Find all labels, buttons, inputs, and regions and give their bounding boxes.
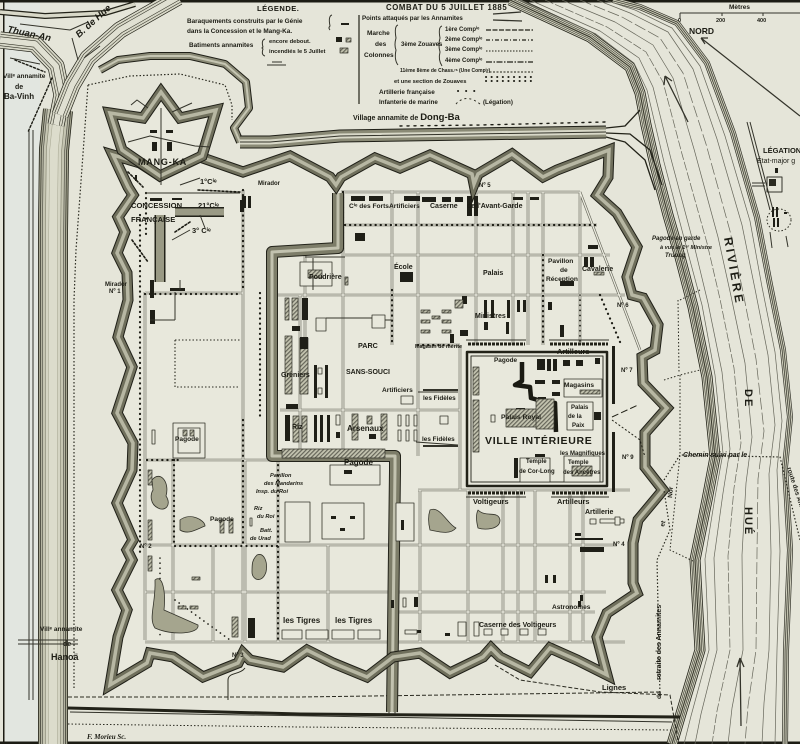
citadel labels: de la	[568, 414, 582, 420]
north arrow	[689, 26, 800, 116]
label: village de Hanoï: Hanoä	[51, 652, 80, 662]
dashed outer enceinte of Mang-Ka	[74, 74, 232, 690]
citadel labels: 21°Cⁱᵉ	[198, 200, 219, 210]
citadel labels: Nº 6	[617, 303, 629, 309]
citadel labels: PARC	[358, 341, 378, 350]
Mang-Ka star fort	[110, 92, 216, 185]
citadel labels: Nº 5	[479, 183, 491, 189]
legend: columns: Points attaqués par les Annamites	[362, 15, 463, 22]
legend: columns: et une section de Zouaves	[394, 79, 466, 85]
scale bar: 400	[757, 18, 766, 24]
citadel ramparts	[110, 150, 667, 685]
heading: Combat: COMBAT DU 5 JUILLET 1885	[386, 3, 507, 12]
river name	[721, 236, 755, 536]
scale bar: Mètres	[729, 4, 750, 11]
citadel labels	[105, 176, 634, 659]
scale bar: 0	[678, 18, 681, 24]
legend: buildings text: Baraquements construits par le Génie	[187, 18, 303, 25]
river: Rivière de Hué	[510, 0, 790, 744]
legend: buildings text	[187, 18, 325, 55]
scale bar: 200	[716, 18, 725, 24]
citadel labels: des Ancêtres	[563, 470, 601, 476]
small buildings in concession	[128, 172, 244, 387]
legend: buildings text: Batiments annamites	[189, 42, 254, 49]
citadel labels: Palais	[571, 405, 589, 411]
legend: columns: Marche	[367, 30, 390, 37]
label: retraite des Annamites: et	[659, 519, 668, 528]
citadel labels: Cavalerie	[582, 266, 613, 273]
label: chemin suivi	[683, 452, 800, 530]
river name: DE	[742, 389, 754, 408]
label: pagode gardée: Pagode en garde	[652, 236, 701, 242]
tree-lined avenues	[140, 190, 620, 642]
citadel labels: Pagode	[494, 357, 518, 364]
legend: columns: Colonnes	[364, 52, 394, 59]
citadel labels: Voltigeurs	[473, 497, 509, 506]
citadel labels: Poudrière	[309, 274, 342, 281]
village houses along canal	[400, 122, 605, 126]
citadel labels: 3° Cⁱᵉ	[192, 225, 211, 235]
palace buildings	[515, 362, 556, 432]
citadel labels: Mirador	[258, 181, 281, 187]
label: village de Hanoï	[40, 626, 83, 662]
legend: buildings text: incendiés le 5 Juillet	[269, 49, 325, 55]
citadel labels: les Fidèles	[423, 395, 456, 402]
citadel labels: de	[560, 267, 568, 274]
interior canal	[160, 193, 395, 712]
label: village de Hanoï: de	[63, 641, 71, 648]
arrow: river current north	[664, 76, 688, 122]
buildings: greniers, riz, arsenaux	[282, 257, 458, 458]
citadel labels: Nº 3	[232, 653, 244, 659]
label: village de Ba-Vinh: Villᵉ annamite	[3, 73, 46, 80]
citadel labels: Magasins	[564, 382, 594, 389]
label: retraite des Annamites	[656, 486, 675, 699]
road grid	[145, 190, 640, 642]
buildings: north barracks	[242, 196, 604, 343]
citadel labels: Arsenaux	[347, 424, 384, 433]
scale bar	[678, 4, 800, 24]
citadel labels: 1°Cⁱᵉ	[200, 176, 217, 186]
citadel labels: Artillerie	[585, 509, 614, 516]
legend: columns: 2ème Compⁱᵉ	[445, 34, 483, 43]
legend: buildings text: dans la Concession et le Mang-Ka.	[187, 28, 292, 35]
label: Mang-Ka: MANG-KA	[138, 157, 187, 167]
river name: RIVIÈRE	[721, 236, 748, 306]
citadel ground	[110, 150, 667, 685]
arrow: river current south	[737, 658, 744, 726]
citadel labels: de Cor-Long	[519, 469, 555, 475]
legend: columns	[362, 15, 513, 106]
citadel labels: Nº 4	[613, 542, 625, 548]
citadel labels: Magasin de mérite	[415, 344, 462, 350]
label: pagode gardée: Truong	[665, 253, 686, 259]
citadel labels: Riz	[254, 506, 263, 512]
ville intérieure enclosure	[466, 340, 645, 497]
label: engraver: F. Morieu Sc.	[87, 733, 126, 741]
label: B. de Hué: B. de Hue	[74, 2, 114, 40]
citadel labels: Temple	[526, 459, 547, 465]
citadel labels: Palais Royal	[501, 414, 541, 421]
citadel labels: Artilleurs	[557, 347, 589, 356]
citadel labels: Pagode	[175, 436, 199, 443]
citadel labels: SANS-SOUCI	[346, 369, 390, 376]
legend: columns: Artillerie française	[379, 89, 435, 96]
label: ville intérieure: VILLE INTÉRIEURE	[485, 434, 592, 447]
label: État-major: État-major g	[757, 156, 795, 165]
legend: brackets and symbols	[262, 15, 351, 65]
citadel labels: Nº 9	[622, 455, 634, 461]
citadel labels: du Roi	[257, 514, 275, 520]
citadel labels: Riz	[292, 424, 303, 431]
label: pagode gardée	[652, 236, 712, 259]
left margin tone	[5, 0, 40, 744]
citadel labels: des Mandarins	[264, 481, 303, 487]
legend divider	[358, 15, 360, 104]
citadel labels: de Urad	[250, 536, 271, 542]
citadel labels: de l'Avant-Garde	[467, 203, 523, 210]
legend: columns: 11ème 8ème de Chass.ʳˢ (Une Compⁱᵉ)	[400, 66, 490, 74]
thin exterior road	[18, 130, 78, 700]
legend: columns: des	[375, 41, 387, 48]
citadel labels: les Tigres	[335, 616, 373, 625]
citadel labels: Paix	[572, 423, 585, 429]
legend: columns: 1ère Compⁱᵉ	[445, 24, 480, 33]
left moat and branches	[0, 0, 178, 744]
citadel labels: FRANÇAISE	[131, 215, 175, 224]
river name: HUÉ	[742, 507, 755, 536]
label: village de Ba-Vinh: Ba-Vinh	[4, 92, 34, 101]
citadel labels: Artificiers	[382, 387, 413, 394]
buildings: south-west and south	[148, 423, 624, 639]
label: lignes: Lignes	[602, 683, 626, 692]
citadel labels: Pavillon	[548, 258, 573, 265]
legend	[187, 3, 533, 106]
citadel labels: Nº 2	[140, 544, 152, 550]
citadel labels: Batt.	[260, 528, 273, 534]
ponds	[151, 476, 500, 633]
citadel labels: Mirador	[105, 282, 128, 288]
citadel labels: les Magnifiques	[560, 451, 606, 457]
label: village de Ba-Vinh: de	[15, 84, 23, 91]
legend: buildings text: encore debout.	[269, 39, 311, 45]
citadel labels: Pavillon	[270, 473, 292, 479]
citadel labels: Greniers	[281, 372, 310, 379]
central south strip	[282, 449, 385, 458]
label: retraite des Annamites: retraite des Annamites	[656, 605, 663, 680]
gates and road from gates	[228, 290, 800, 740]
citadel labels: les Fidèles	[422, 436, 455, 443]
citadel labels: Artificiers	[389, 203, 420, 210]
citadel labels: Astronomes	[552, 604, 591, 611]
citadel labels: CONCESSION	[131, 201, 182, 210]
citadel labels: Pagode	[344, 458, 373, 467]
bottom canal	[68, 668, 680, 730]
citadel labels: Insp. du Roi	[256, 489, 288, 495]
heading: Légende: LÉGENDE.	[257, 4, 299, 13]
upper canal	[100, 56, 662, 190]
citadel labels: Cⁱᵉ des Forts	[349, 201, 389, 210]
legend: columns: 4ème Compⁱᵉ	[445, 55, 483, 64]
citadel labels: Caserne	[430, 203, 458, 210]
citadel labels: Réception	[546, 276, 578, 283]
legend: columns: 3ème Zouaves	[401, 42, 443, 48]
legend: columns: (Légation)	[483, 99, 513, 106]
citadel labels: École	[394, 262, 413, 271]
citadel labels: Artilleurs	[557, 497, 589, 506]
citadel labels: Nº 7	[621, 368, 633, 374]
legend: columns: Infanterie de marine	[379, 99, 438, 106]
north arrow: NORD	[689, 26, 714, 36]
label: retraite des Annamites: Nor	[667, 486, 675, 498]
citadel labels: Temple	[568, 460, 589, 466]
citadel labels: Ministres	[475, 313, 506, 320]
label: pagode gardée: à vue le 1ᵉʳ Ministre	[660, 244, 712, 251]
citadel labels: Pagode	[210, 516, 234, 523]
citadel labels: Nº 1	[109, 289, 121, 295]
label: Thuan-An: Thuan-An	[6, 24, 52, 44]
legend: line samples	[456, 12, 533, 104]
citadel labels: Palais	[483, 270, 503, 277]
label: retraite des Annamites: de	[656, 691, 663, 699]
label: village de Ba-Vinh	[3, 73, 46, 101]
légation post	[747, 122, 800, 248]
label: village de Dong-Ba: Village annamite de Dong-Ba	[353, 112, 460, 123]
label: chemin suivi: Chemin suivi par le	[683, 452, 747, 459]
citadel labels: Caserne des Voltigeurs	[479, 622, 556, 629]
label: village de Hanoï: Villᵉ annamite	[40, 626, 83, 633]
citadel labels: les Tigres	[283, 616, 321, 625]
legend: columns: 3ème Compⁱᵉ	[445, 44, 483, 53]
